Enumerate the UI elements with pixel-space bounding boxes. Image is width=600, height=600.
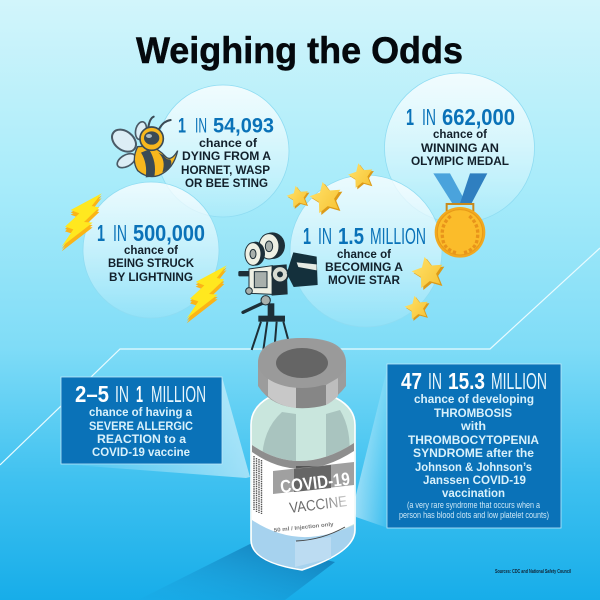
panel: movie star: chance of (337, 249, 391, 261)
icon: vaccine vial: 50 ml / Injection only (274, 522, 335, 534)
panel: thrombosis: 15.3 (448, 368, 485, 394)
panel: bee sting: OR BEE STING (185, 178, 268, 190)
icon: vaccine vial (251, 338, 355, 570)
panel: bee sting: 1 (178, 114, 186, 138)
panel: thrombosis: THROMBOSIS (434, 408, 512, 420)
panel: severe allergic reaction: SEVERE ALLERGIC (89, 421, 193, 433)
icon: lightning bolt lower (187, 265, 227, 323)
panel: olympic medal: OLYMPIC MEDAL (411, 156, 509, 168)
panel: lightning: 500,000 (133, 220, 205, 246)
barcode (254, 456, 262, 514)
panel: lightning: BY LIGHTNING (109, 272, 193, 284)
panel: bee sting (157, 85, 289, 217)
panel: thrombosis: THROMBOCYTOPENIA (408, 435, 539, 447)
horizon line (0, 248, 600, 465)
panel: severe allergic reaction: chance of having a (89, 407, 193, 419)
icon: medal (433, 173, 487, 258)
icon: vaccine vial: VACCINE (288, 493, 348, 517)
panel: olympic medal: chance of (433, 129, 487, 141)
icon: star 5 (403, 293, 432, 322)
panel: thrombosis: SYNDROME after the (413, 448, 534, 460)
panel: severe allergic reaction: 2–5 (75, 381, 109, 407)
panel: olympic medal: 662,000 (442, 104, 515, 130)
icon: star 3 (346, 160, 377, 191)
panel: olympic medal: WINNING AN (421, 143, 499, 155)
panel: thrombosis: chance of developing (414, 394, 534, 406)
panel: thrombosis: IN (428, 368, 442, 394)
vial label (252, 443, 354, 537)
panel: thrombosis: Janssen COVID-19 (423, 475, 526, 487)
icon: movie camera (238, 232, 318, 350)
panel: bee sting: 54,093 (213, 114, 274, 138)
panel: severe allergic reaction: COVID-19 vaccine (92, 447, 190, 459)
icon: bee (108, 117, 178, 177)
panel: severe allergic reaction (61, 377, 222, 464)
title: Weighing the Odds (136, 30, 463, 71)
panel: bee sting: IN (195, 114, 207, 138)
panel: movie star (290, 175, 442, 327)
panel: olympic medal: IN (422, 104, 436, 130)
vial floor shadow (138, 543, 335, 600)
panel: bee sting: DYING FROM A (182, 151, 271, 163)
panel: thrombosis: vaccination (442, 488, 505, 500)
panel: lightning (83, 182, 219, 318)
vial base (252, 520, 354, 569)
label box (273, 462, 354, 494)
right light beam (354, 365, 388, 528)
panel: lightning: IN (113, 220, 127, 246)
panel: thrombosis: with (460, 421, 486, 433)
vial cap (258, 338, 346, 408)
panel: movie star: 1 (303, 223, 311, 249)
panel: thrombosis: Johnson & Johnson’s (415, 462, 532, 474)
panel: movie star: IN (318, 223, 332, 249)
icon: star 4 (409, 253, 448, 292)
panel: thrombosis: MILLION (491, 368, 547, 394)
icon: star 1 (285, 183, 312, 210)
icon: lightning bolt upper (62, 193, 102, 251)
panel: movie star: MOVIE STAR (328, 275, 401, 287)
panel: movie star: BECOMING A (325, 262, 403, 274)
icon: star 2 (307, 178, 346, 217)
panel: severe allergic reaction: 1 (136, 381, 143, 407)
panel: severe allergic reaction: IN (115, 381, 129, 407)
panel: severe allergic reaction: MILLION (151, 381, 206, 407)
panel: severe allergic reaction: REACTION to a (97, 434, 187, 446)
panel: movie star: 1.5 (338, 223, 364, 249)
panel: thrombosis (387, 364, 561, 528)
panel: lightning: chance of (124, 245, 178, 257)
panel: bee sting: chance of (199, 138, 257, 150)
panel: olympic medal (384, 73, 534, 223)
panel: thrombosis: (a very rare syndrome that occurs when a (407, 500, 541, 511)
panel: bee sting: HORNET, WASP (181, 165, 270, 177)
vaccine name: COVID-19 (279, 469, 351, 497)
panel: thrombosis: 47 (401, 368, 422, 394)
left light beam (73, 377, 250, 478)
panel: movie star: MILLION (370, 223, 426, 249)
vial glass stripes (262, 410, 350, 467)
panel: thrombosis: person has blood clots and low platelet counts) (399, 510, 549, 521)
panel: olympic medal: 1 (406, 104, 414, 130)
panel: lightning: 1 (97, 220, 105, 246)
panel: lightning: BEING STRUCK (108, 258, 195, 270)
